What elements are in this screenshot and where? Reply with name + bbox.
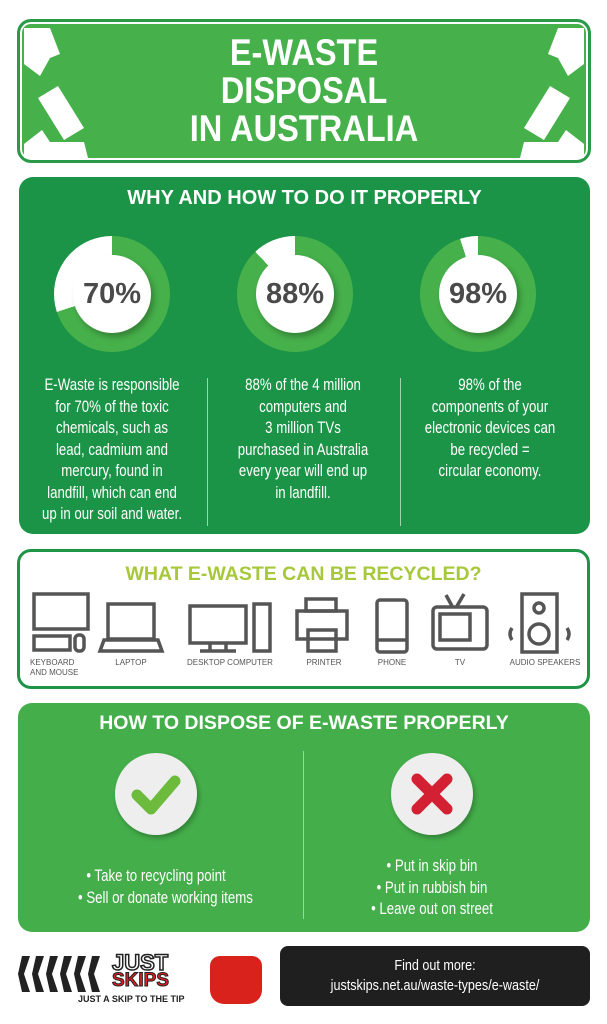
icon: recycle arrows left	[24, 28, 88, 158]
icon: recycle arrows right	[520, 28, 584, 158]
text: column 3: 98% of the	[458, 375, 522, 394]
text: column 1: mercury, found in	[61, 461, 163, 480]
panel: why and how	[19, 177, 590, 534]
icon: check	[115, 753, 197, 835]
panel: what can be recycled	[17, 549, 590, 689]
text: column 2: purchased in Australia	[238, 440, 368, 458]
text: column 2: in landfill.	[275, 482, 331, 502]
text: AUDIO SPEAKERS	[510, 658, 580, 667]
text: do	[78, 866, 253, 906]
icon: desktop	[190, 604, 270, 651]
labels	[30, 658, 78, 677]
logo: just skips: SKIPS	[112, 970, 169, 991]
text: PHONE	[378, 658, 406, 667]
text: column 1: lead, cadmium and	[56, 440, 168, 458]
icon: laptop	[100, 604, 162, 651]
title	[190, 32, 418, 149]
text: LAPTOP	[115, 658, 147, 667]
logo: just skips: JUST	[112, 950, 168, 975]
donut: 98%	[420, 236, 536, 352]
panel: how to dispose	[18, 703, 590, 932]
text: column 1: landfill, which can end	[47, 482, 177, 502]
donut: 70%	[54, 236, 170, 352]
donut: 70%: 70%	[83, 278, 141, 310]
text: don't: • Put in skip bin	[387, 856, 477, 875]
text: DESKTOP COMPUTER	[187, 658, 273, 667]
text: column 3: components of your	[432, 396, 548, 416]
text: column 2: 88% of the 4 million	[245, 375, 361, 394]
icon: phone	[377, 600, 407, 652]
text: column 2: every year will end up	[239, 461, 367, 480]
heading: recycled: WHAT E-WASTE CAN BE RECYCLED?	[125, 563, 482, 585]
title: IN AUSTRALIA	[190, 108, 418, 149]
logo: just skips	[18, 950, 262, 1004]
text: don't: • Put in rubbish bin	[377, 878, 487, 896]
text: column 3	[425, 375, 555, 480]
donut: 88%	[237, 236, 353, 352]
text: column 3: electronic devices can	[425, 418, 555, 437]
donut: 98%: 98%	[449, 278, 507, 310]
donut: 88%: 88%	[266, 278, 324, 310]
title: E-WASTE	[230, 32, 378, 73]
text: column 3: be recycled =	[450, 440, 530, 458]
text: column 1: for 70% of the toxic	[55, 396, 169, 416]
callout: find out more: Find out more:	[394, 957, 476, 974]
icon: keyboard and mouse	[34, 594, 88, 651]
labels: KEYBOARD	[30, 658, 74, 667]
icon: printer	[297, 599, 347, 651]
heading: WHY AND HOW TO DO IT PROPERLY	[127, 187, 482, 209]
text: column 2: computers and	[259, 396, 347, 416]
callout: find out more: justskips.net.au/waste-types/e-waste/	[331, 977, 539, 994]
logo: just skips: JUST A SKIP TO THE TIP	[78, 994, 185, 1004]
text: do: • Take to recycling point	[86, 866, 226, 885]
heading: HOW TO DISPOSE OF E-WASTE PROPERLY	[99, 712, 509, 734]
text: column 1: up in our soil and water.	[42, 504, 182, 523]
text: column 3: circular economy.	[439, 461, 541, 480]
text: column 1: chemicals, such as	[56, 418, 168, 437]
icon: speakers	[510, 594, 569, 652]
header banner	[17, 19, 591, 163]
text: column 2: 3 million TVs	[265, 418, 341, 437]
icon: cross	[391, 753, 473, 835]
text: column 2	[238, 375, 368, 502]
text: PRINTER	[306, 658, 342, 667]
text: don't	[371, 856, 493, 918]
text: column 1: E-Waste is responsible	[44, 375, 180, 394]
title: DISPOSAL	[221, 70, 387, 111]
text: TV	[455, 658, 465, 667]
text: do: • Sell or donate working items	[78, 888, 253, 906]
callout: find out more	[280, 946, 590, 1006]
text: don't: • Leave out on street	[371, 899, 493, 918]
icons row	[32, 592, 571, 654]
icon: tv	[433, 594, 487, 649]
text: column 1	[42, 375, 182, 523]
labels: AND MOUSE	[30, 668, 78, 677]
